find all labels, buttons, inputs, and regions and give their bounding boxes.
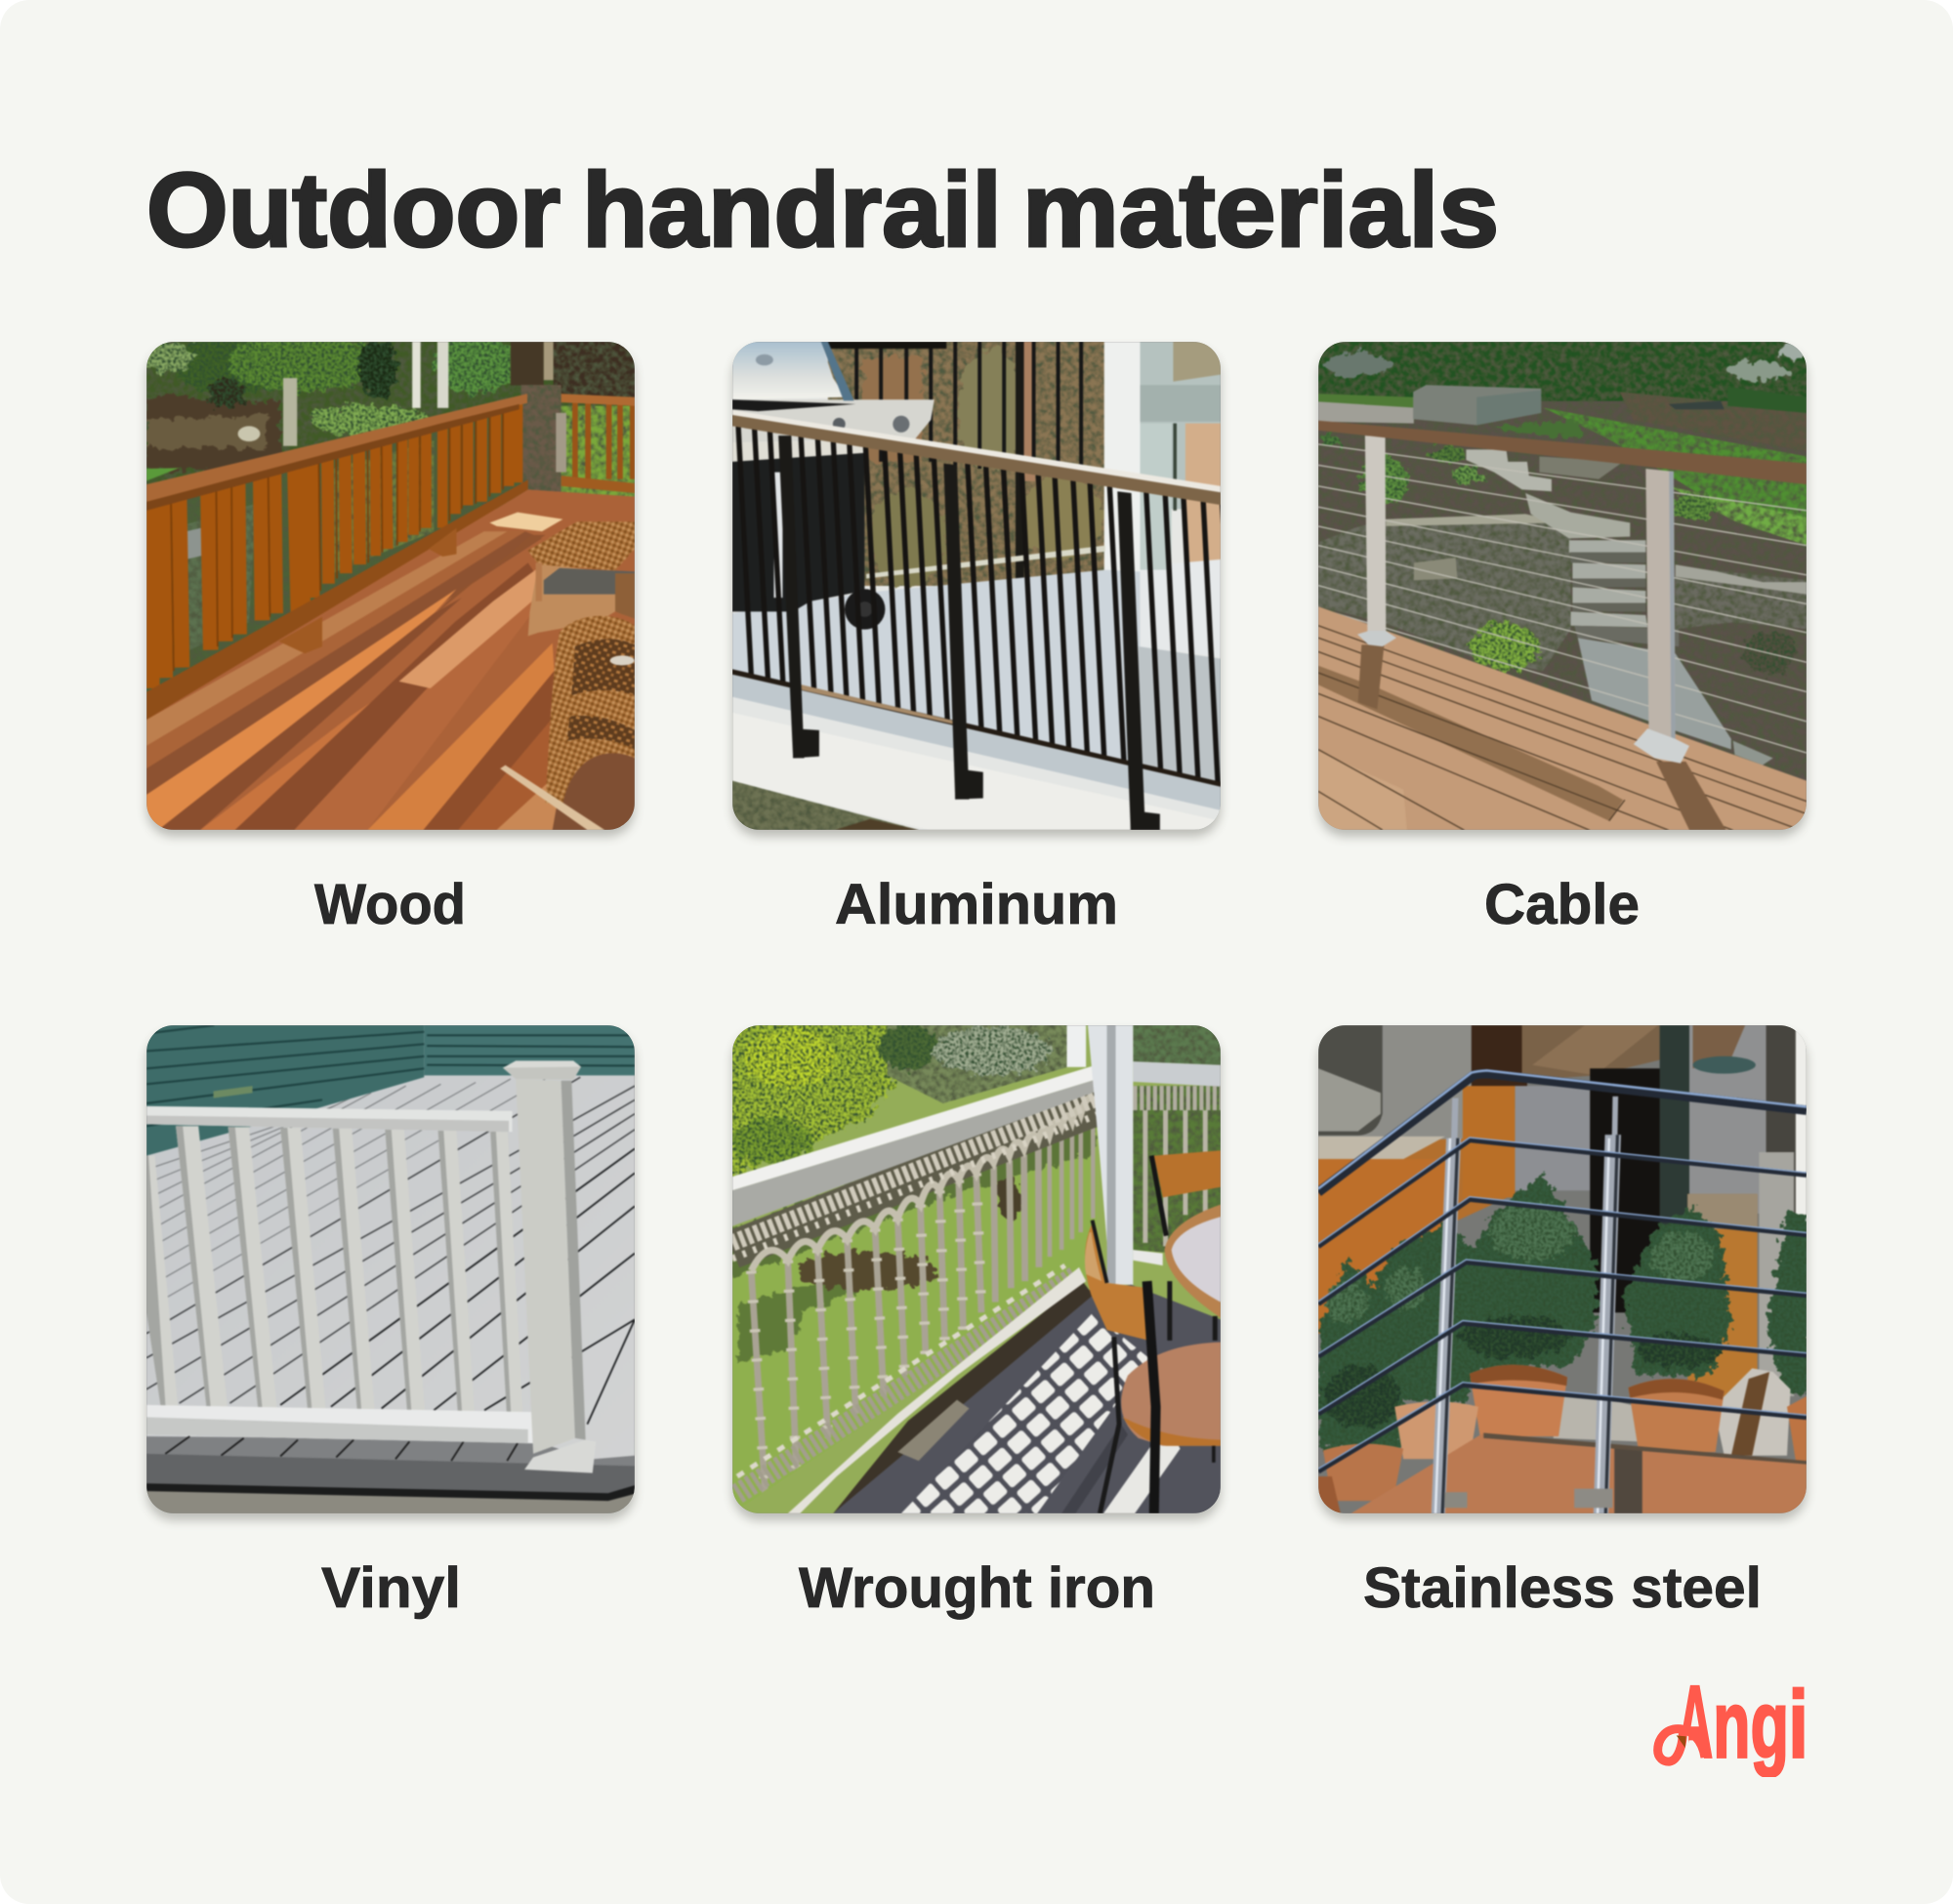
panel: cable [1312,342,1812,936]
deck floor [732,570,1221,790]
deck [1318,606,1807,830]
panel: wood [141,342,641,936]
logo: Angi: A [1677,1665,1713,1777]
foliage [727,1019,901,1180]
title: handrail [582,150,1002,269]
posts [778,435,1160,830]
table [1164,1205,1221,1318]
logo: Angi: i [1789,1671,1808,1777]
deck planks [146,489,635,830]
chair near [1085,1221,1148,1341]
photo: stainless steel railing [1318,1025,1807,1513]
bottom rail [732,669,1221,787]
right side rail [1133,1061,1221,1087]
chair far [1154,1150,1221,1197]
chair and misc [1554,1396,1639,1441]
floor [833,1285,1221,1513]
teal siding [146,1025,424,1156]
floor light lattice [901,1312,1148,1513]
green shrub [1470,494,1796,675]
posts [1365,435,1386,636]
iron lattice bottom [737,1276,1075,1494]
soil patches, shrubs [1319,432,1485,506]
column [1066,1025,1086,1067]
top rail [1318,421,1807,484]
top rail [146,393,527,504]
balusters right [575,399,633,479]
bottom rail [146,1405,533,1443]
stone wall [1318,514,1571,671]
lawn & shadow [732,1090,1097,1513]
stairs [1466,449,1552,491]
label: Cable: Cable [1484,873,1640,936]
label: Aluminum: Aluminum [835,873,1118,936]
photo: vinyl railing [146,1025,635,1513]
balusters [734,426,1221,783]
photo: cable railing [1318,342,1807,830]
pots [1470,1365,1567,1436]
horizontal rails [1318,1074,1807,1471]
planter wall [1351,1433,1807,1513]
photo: wood deck railing [146,342,635,830]
fascia [732,675,1221,810]
bottom rail [146,479,528,720]
panel: vinyl [141,1025,641,1620]
uprights [1432,1097,1621,1513]
far balusters [856,342,1081,476]
title: Outdoor [146,150,561,269]
logo: Angi: g [1751,1671,1789,1777]
panel: wrought iron [727,1025,1226,1620]
balusters [150,404,518,688]
lower deck band [146,1436,635,1494]
title: materials [1022,150,1499,269]
photo: wrought iron railing [732,1025,1221,1513]
label: Wrought iron: Wrought iron [799,1556,1155,1620]
white column and window [1104,342,1141,606]
building [1318,1025,1472,1143]
post [516,1079,575,1454]
logo: Angi [1653,1665,1808,1777]
top rail white [732,1063,1103,1190]
logo: Angi: n [1713,1671,1750,1777]
iron lattice top [732,1097,1100,1494]
white sill [788,1267,1086,1513]
top rail [146,1106,513,1132]
grill [732,342,846,399]
shrubs [1318,1173,1811,1449]
label: Vinyl: Vinyl [321,1556,461,1620]
title [146,150,1499,269]
panel: aluminum [727,342,1226,936]
wicker table [528,562,615,636]
label: Wood: Wood [314,873,466,936]
panel: stainless steel [1312,1025,1812,1620]
stone block [1413,385,1541,425]
floor lines [146,1079,546,1309]
lawn and path [1318,393,1414,408]
label: Stainless steel: Stainless steel [1363,1556,1762,1620]
trees [1318,342,1807,401]
top rail [732,410,1221,494]
balusters [146,1126,523,1420]
iron balusters [751,1099,1093,1494]
photo: aluminum railing [732,342,1221,830]
wicker chair [553,751,635,830]
cables [1318,444,1807,753]
